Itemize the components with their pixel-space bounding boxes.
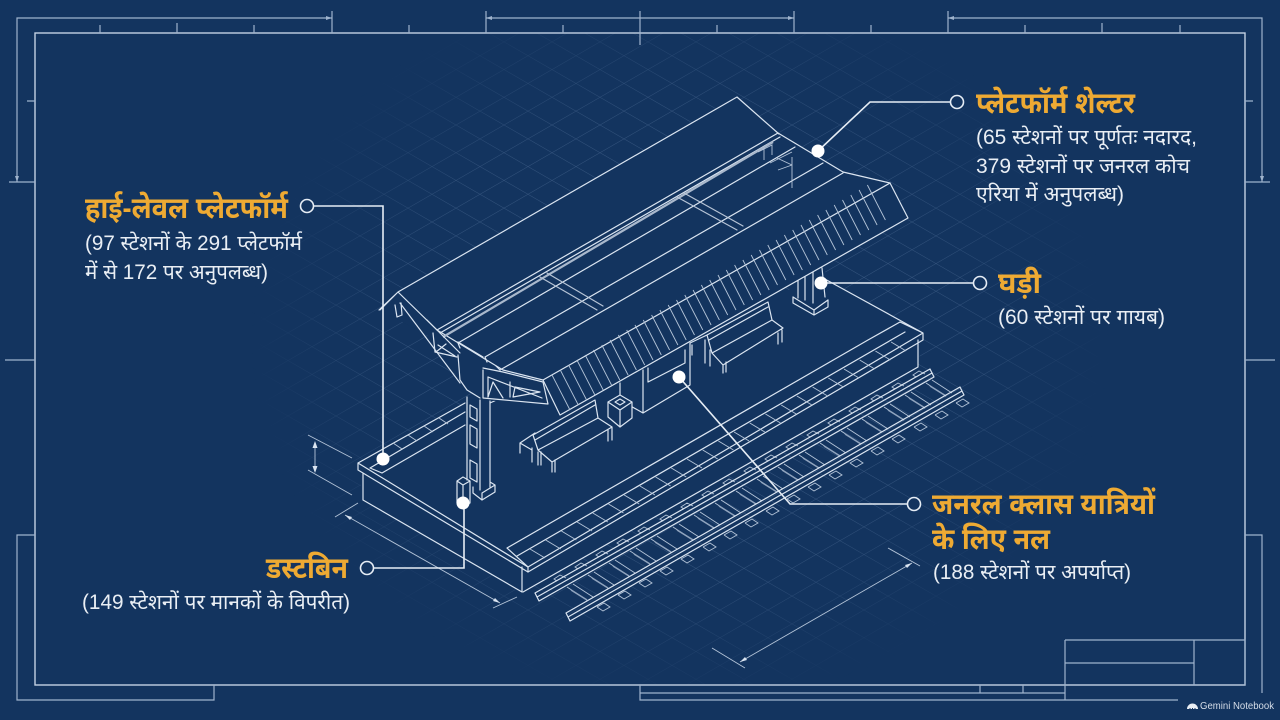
bench front [520, 400, 612, 472]
leader line [812, 96, 964, 158]
roof [379, 97, 908, 415]
roof cross bars [540, 193, 743, 310]
description: (149 स्टेशनों पर मानकों के विपरीत) [82, 590, 350, 614]
description [976, 125, 1197, 207]
watermark: Gemini Notebook: Gemini Notebook [1200, 700, 1275, 712]
description: एरिया में अनुपलब्ध) [976, 182, 1124, 207]
description: (65 स्टेशनों पर पूर्णतः नदारद, [976, 125, 1197, 150]
small dustbin on platform [457, 477, 470, 507]
waste box [608, 395, 632, 427]
railway track [535, 369, 969, 621]
isometric platform shelter drawing [358, 97, 969, 621]
leader line [300, 200, 390, 466]
callout: high-level platform [85, 190, 390, 466]
dimension marks around platform [308, 435, 920, 668]
roof back slope [379, 97, 779, 383]
heading: के लिए नल [932, 521, 1051, 556]
description [85, 231, 303, 285]
roof longitudinal strips [437, 133, 890, 370]
heading: घड़ी [998, 266, 1042, 300]
callout: dustbin [82, 477, 470, 614]
description: (188 स्टेशनों पर अपर्याप्त) [933, 560, 1131, 584]
callout: clock [814, 266, 1165, 329]
heading: प्लेटफॉर्म शेल्टर [976, 85, 1136, 120]
isometric background grid [294, 34, 1066, 668]
far truss [758, 145, 792, 188]
callout: platform shelter [812, 85, 1197, 207]
description: 379 स्टेशनों पर जनरल कोच [976, 154, 1191, 178]
bench rear [690, 302, 783, 373]
description: (60 स्टेशनों पर गायब) [998, 305, 1165, 329]
left column [467, 397, 495, 500]
platform base [358, 278, 923, 592]
near truss [427, 320, 548, 404]
heading: जनरल क्लास यात्रियों [932, 487, 1156, 521]
front fascia with hatching [543, 183, 908, 415]
heading: डस्टबिन [265, 551, 348, 585]
leader line [672, 370, 920, 510]
callout: water taps [672, 370, 1156, 584]
heading [932, 487, 1156, 556]
leader line [814, 276, 986, 290]
right column [793, 268, 828, 315]
kiosk [620, 343, 690, 413]
description: में से 172 पर अनुपलब्ध) [85, 260, 268, 285]
description: (97 स्टेशनों के 291 प्लेटफॉर्म [85, 231, 303, 255]
leader line [360, 496, 470, 574]
icon: dome [1187, 704, 1198, 709]
heading: हाई-लेवल प्लेटफॉर्म [85, 190, 289, 225]
